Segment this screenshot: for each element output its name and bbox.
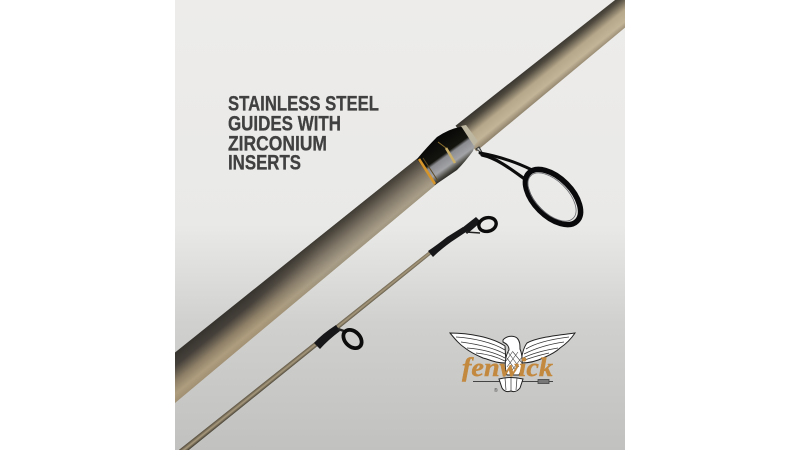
heading xyxy=(228,92,379,174)
guide wrap xyxy=(417,125,478,185)
heading: GUIDES WITH xyxy=(228,112,341,136)
small top guide xyxy=(466,216,498,233)
heading: STAINLESS STEEL xyxy=(228,92,379,116)
eagle body and head xyxy=(503,336,522,375)
large guide frame and ring xyxy=(476,147,590,234)
small lower guide xyxy=(338,326,365,352)
heading: ZIRCONIUM xyxy=(228,132,327,155)
heading: INSERTS xyxy=(228,152,301,174)
left wing xyxy=(450,333,506,363)
small rod wraps xyxy=(314,217,481,349)
rod line and talons xyxy=(473,378,553,392)
panel: gradient background xyxy=(175,0,625,450)
large rod blank, lower section xyxy=(175,158,438,403)
right wing xyxy=(521,333,575,363)
registered mark: ® xyxy=(494,387,498,394)
fenwick eagle logo xyxy=(450,333,575,394)
small rod blank xyxy=(171,250,433,450)
large rod blank, upper section xyxy=(456,0,625,152)
product infographic xyxy=(175,0,625,450)
wordmark: fenwick xyxy=(462,353,553,382)
